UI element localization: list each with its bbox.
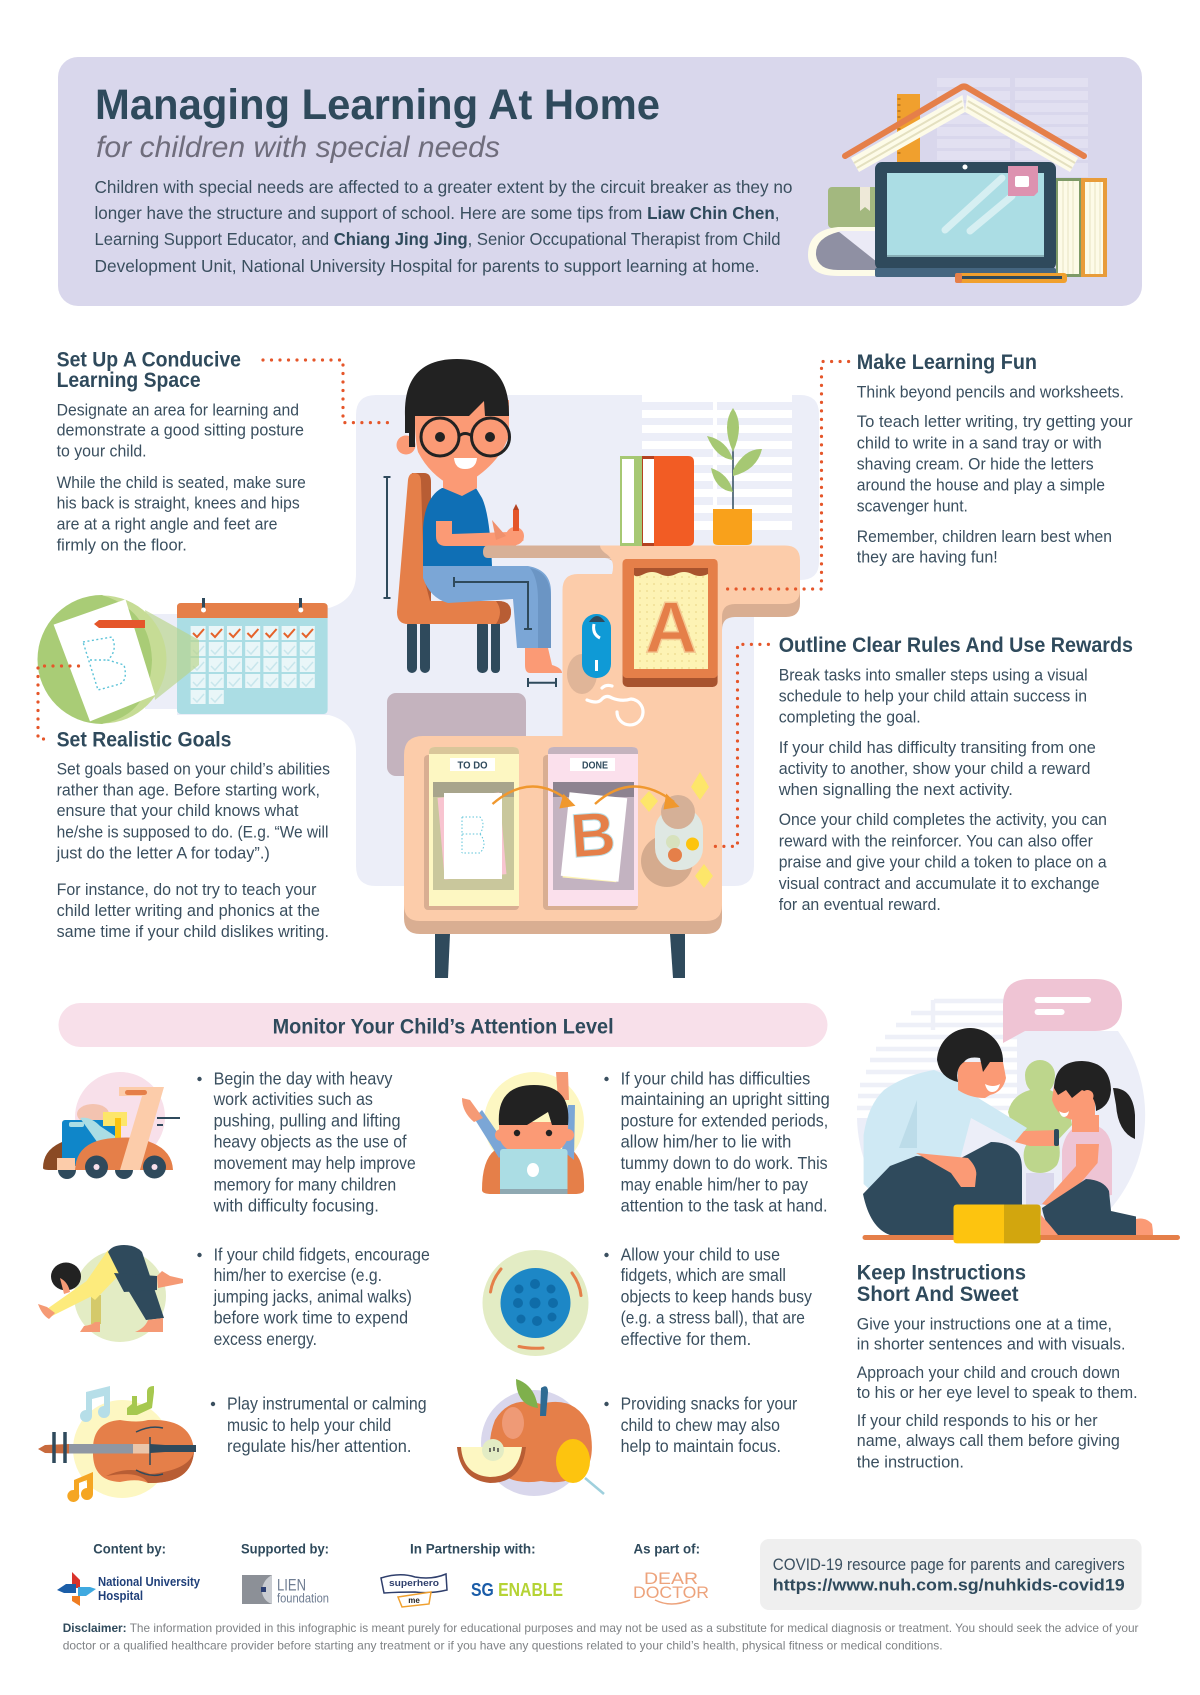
bullet text: heavy work: work activities such as (213, 1089, 373, 1109)
child (396, 359, 562, 673)
body text: praise and give your child a token to place on a (779, 854, 1107, 872)
bullet text: heavy work (197, 1068, 416, 1215)
section heading pill: Monitor Your Child’s Attention Level (273, 1015, 614, 1038)
bullet text: music (211, 1394, 427, 1456)
disclaimer: Disclaimer: The information provided in this infographic is meant purely for educational purposes and may not be used as a substitute for medical diagnosis or treatment. You should seek the advice of your (63, 1621, 1139, 1635)
panel: make learning fun (857, 351, 1133, 566)
logo: Lien Foundation: foundation (277, 1592, 329, 1606)
bullet text: snacks (604, 1394, 797, 1456)
bullet text: fidgets: (e.g. a stress ball), that are (621, 1307, 805, 1327)
body text: Think beyond pencils and worksheets. (857, 383, 1124, 401)
body text: in shorter sentences and with visuals. (857, 1336, 1126, 1354)
sharpener (567, 614, 611, 694)
body text: to your child. (57, 443, 147, 461)
bullet text: heavy work: memory for many children (214, 1174, 396, 1194)
books (620, 456, 694, 546)
body text (57, 401, 306, 554)
heading (857, 1262, 1026, 1306)
body text: scavenger hunt. (857, 497, 968, 515)
bullet text: exercise: If your child fidgets, encourage (214, 1245, 430, 1265)
body text: rather than age. Before starting work, (57, 782, 320, 800)
body text (857, 1316, 1138, 1472)
body text: Break tasks into smaller steps using a visual (779, 667, 1088, 685)
bullet text: lie tummy down: tummy down to do work. This (621, 1153, 828, 1173)
body text: child to write in a sand tray or with (857, 434, 1102, 452)
body text: Once your child completes the activity, you can (779, 811, 1107, 829)
body text: to his or her eye level to speak to them. (857, 1384, 1138, 1402)
body text: around the house and play a simple (857, 476, 1105, 494)
heading: Keep Instructions (857, 1262, 1026, 1285)
to do tray (424, 747, 519, 910)
illustration: goal calendar and worksheet (38, 595, 328, 724)
body text (56, 760, 330, 941)
panel: monitor attention level (38, 1003, 830, 1502)
body text: for an eventual reward. (779, 896, 941, 914)
parent figure (863, 1028, 1059, 1235)
body text: name, always call them before giving (857, 1432, 1120, 1450)
body text: his back is straight, knees and hips (57, 494, 300, 512)
icon: apple and snacks (457, 1379, 604, 1496)
logo: Superhero Me (381, 1574, 447, 1607)
done tray (543, 747, 638, 910)
body text: Set goals based on your child’s abilities (57, 760, 330, 778)
body text: Give your instructions one at a time, (857, 1316, 1112, 1334)
bullet text: lie tummy down: If your child has difficulties (621, 1068, 811, 1088)
dotted connector lines (38, 360, 849, 846)
bullet text: exercise: excess energy. (214, 1329, 317, 1349)
subtitle: for children with special needs (96, 131, 500, 164)
heading: Short And Sweet (857, 1283, 1019, 1306)
letter A board (623, 559, 718, 687)
logo: Lien Foundation (242, 1575, 329, 1606)
body text: Approach your child and crouch down (857, 1364, 1120, 1382)
bullet text: music: regulate his/her attention. (227, 1436, 411, 1456)
bullet text: music: Play instrumental or calming (227, 1394, 427, 1414)
bullet text: lie tummy down: posture for extended periods, (621, 1111, 828, 1131)
body text: just do the letter A for today”.) (56, 845, 270, 863)
intro text (94, 177, 792, 276)
logo: National University Hospital (57, 1572, 200, 1606)
body text: visual contract and accumulate it to exchange (779, 875, 1100, 893)
credit labels: Supported by: (241, 1541, 329, 1556)
purple block (387, 693, 526, 776)
body text: child letter writing and phonics at the (57, 902, 320, 920)
body text: he/she is supposed to do. (E.g. “We will (57, 824, 328, 842)
icon: book house with tablet (808, 78, 1107, 283)
body text: schedule to help your child attain success in (779, 688, 1087, 706)
bullet text: music: music to help your child (227, 1415, 391, 1435)
logo: Superhero Me: me (408, 1596, 420, 1605)
reward jar (640, 772, 713, 888)
logo: Dear Doctor: DEAR (644, 1569, 698, 1588)
icon: toy car (43, 1072, 180, 1179)
callout: resource link: https://www.nuh.com.sg/nuhkids-covid19 (773, 1576, 1125, 1595)
body text: they are having fun! (857, 548, 998, 566)
body text: If your child has difficulty transiting from one (779, 739, 1096, 757)
credit labels (93, 1541, 700, 1556)
arrows between trays (492, 786, 677, 808)
body text: firmly on the floor. (57, 536, 187, 554)
icon: stress ball (482, 1250, 588, 1356)
icon: child lying with laptop (462, 1072, 584, 1194)
logo: Dear Doctor: DOCTOR (633, 1583, 709, 1602)
white squiggle (587, 685, 643, 725)
body text: same time if your child dislikes writing. (57, 923, 329, 941)
background stripes (857, 1000, 1017, 1108)
bullet text: heavy work: Begin the day with heavy (214, 1068, 393, 1088)
illustration: parent talking to child (857, 979, 1180, 1243)
logo: National University Hospital: National University (98, 1575, 200, 1589)
worksheet circle (38, 595, 167, 724)
desk (404, 546, 800, 978)
measurement markers (384, 477, 556, 687)
background circle (857, 1031, 1145, 1235)
icon: child exercising (38, 1245, 183, 1342)
body text: when signalling the next activity. (778, 781, 1013, 799)
done tray: DONE (582, 761, 608, 772)
to do tray: TO DO (458, 761, 488, 772)
body text: the instruction. (857, 1454, 964, 1472)
credit labels: As part of: (634, 1541, 700, 1556)
panel: keep instructions short and sweet (857, 1262, 1138, 1472)
intro text: Development Unit, National University Hospital for parents to support learning at home. (94, 256, 760, 276)
disclaimer (63, 1621, 1139, 1652)
bullet text: heavy work: movement may help improve (214, 1153, 416, 1173)
bullet text: lie tummy down (604, 1068, 830, 1215)
done tray: B (568, 800, 618, 871)
body text (778, 667, 1107, 914)
logo: Lien Foundation: LIEN (277, 1576, 306, 1595)
intro text: longer have the structure and support of school. Here are some tips from Liaw Chin Chen, (94, 203, 780, 223)
disclaimer: doctor or a qualified healthcare provider before starting any treatment or if you have any questions related to your child’s health, physical fitness or medical conditions. (63, 1638, 943, 1652)
illustration: desk scene (145, 359, 819, 978)
yellow block (954, 1204, 1041, 1243)
heading: Make Learning Fun (857, 351, 1037, 374)
body text: Designate an area for learning and (57, 401, 299, 419)
background room shape (145, 395, 819, 886)
bullet text: exercise: before work time to expend (214, 1307, 408, 1327)
body text: reward with the reinforcer. You can also offer (779, 832, 1093, 850)
bullet text: lie tummy down: may enable him/her to pay (621, 1174, 808, 1194)
heading: Learning Space (57, 369, 201, 392)
bullet text: fidgets (604, 1245, 812, 1349)
heading (57, 349, 241, 392)
bullet text: heavy work: with difficulty focusing. (213, 1195, 379, 1215)
callout: resource link: COVID-19 resource page for parents and caregivers (773, 1556, 1125, 1574)
callout: resource link (760, 1539, 1142, 1610)
body text: completing the goal. (779, 709, 921, 727)
panel: set realistic goals (56, 729, 330, 941)
credit labels: Content by: (93, 1541, 166, 1556)
panel: set up a conducive learning space (57, 349, 306, 554)
bullet text: fidgets: objects to keep hands busy (621, 1286, 812, 1306)
letter A board: A (645, 588, 697, 668)
body text: To teach letter writing, try getting your (857, 413, 1133, 431)
bullet text: heavy work: heavy objects as the use of (214, 1132, 407, 1152)
bullet text: exercise: him/her to exercise (e.g. (214, 1265, 382, 1285)
title: Managing Learning At Home (95, 81, 660, 129)
speech bubble (1003, 979, 1122, 1043)
window blinds (642, 395, 792, 530)
body text: are at a right angle and feet are (57, 516, 277, 534)
bullet text: lie tummy down: attention to the task at hand. (621, 1195, 828, 1215)
panel: outline clear rules and use rewards (778, 634, 1133, 914)
bullet text: lie tummy down: maintaining an upright sitting (621, 1089, 830, 1109)
plant (707, 408, 762, 545)
bullet text: fidgets: effective for them. (621, 1329, 751, 1349)
bullet text: lie tummy down: allow him/her to lie with (621, 1132, 791, 1152)
child figure (1041, 1061, 1153, 1235)
intro text: Learning Support Educator, and Chiang Jing Jing, Senior Occupational Therapist from Child (94, 229, 780, 249)
bullet text: snacks: child to chew may also (621, 1415, 780, 1435)
heading: Set Up A Conducive (57, 349, 241, 372)
chair (397, 473, 511, 673)
body text (857, 383, 1133, 566)
logo: Superhero Me: superhero (389, 1578, 439, 1589)
plant (1008, 1060, 1072, 1205)
bullet text: heavy work: pushing, pulling and lifting (214, 1111, 400, 1131)
body text: shaving cream. Or hide the letters (857, 456, 1094, 474)
magnifier beam (145, 610, 199, 700)
icon: violin and music notes (38, 1386, 196, 1502)
body text: demonstrate a good sitting posture (57, 422, 304, 440)
body text: ensure that your child knows what (57, 802, 299, 820)
floor line (862, 1235, 1180, 1240)
body text: For instance, do not try to teach your (57, 881, 317, 899)
bullet text: exercise (197, 1245, 430, 1349)
calendar (177, 598, 328, 714)
body text: Remember, children learn best when (857, 528, 1112, 546)
bullet text: snacks: help to maintain focus. (621, 1436, 781, 1456)
body text: activity to another, show your child a reward (779, 760, 1090, 778)
logo: SG Enable: SG ENABLE (471, 1580, 563, 1600)
heading: Set Realistic Goals (57, 729, 231, 752)
bullet text: fidgets: fidgets, which are small (621, 1265, 786, 1285)
section heading pill (58, 1003, 828, 1047)
footer: partner credits (57, 1541, 709, 1607)
heading: Outline Clear Rules And Use Rewards (779, 634, 1133, 657)
intro text: Children with special needs are affected to a greater extent by the circuit breaker as they no (94, 177, 792, 197)
bullet text: fidgets: Allow your child to use (621, 1245, 780, 1265)
body text: While the child is seated, make sure (57, 474, 306, 492)
body text: If your child responds to his or her (857, 1412, 1098, 1430)
credit labels: In Partnership with: (410, 1541, 536, 1556)
logo: National University Hospital: Hospital (98, 1589, 143, 1603)
logo: Dear Doctor (633, 1569, 709, 1604)
panel: header banner (58, 57, 1142, 306)
bullet text: exercise: jumping jacks, animal walks) (213, 1286, 412, 1306)
bullet text: snacks: Providing snacks for your (621, 1394, 797, 1414)
